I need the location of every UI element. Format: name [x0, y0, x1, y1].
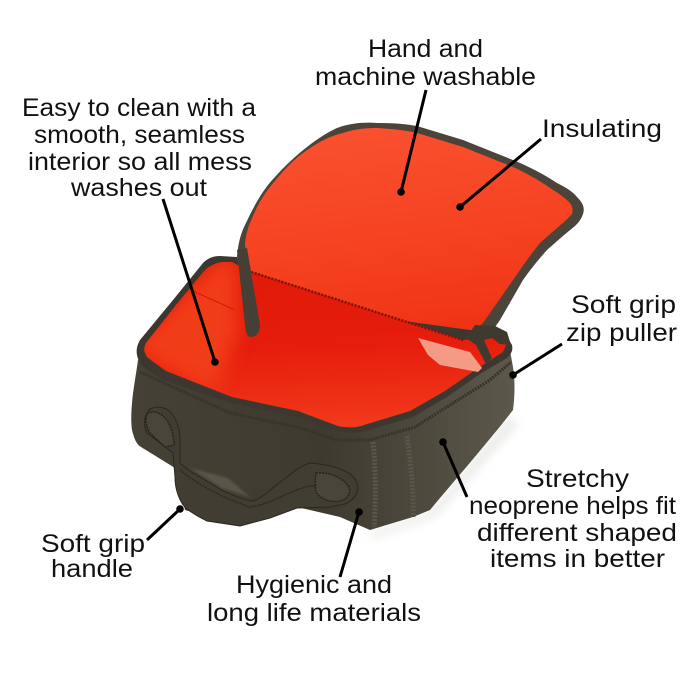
label: stretchy neoprene: items in better — [490, 545, 665, 573]
label: soft grip zip puller: Soft grip — [571, 291, 676, 319]
label: easy to clean: smooth, seamless — [34, 121, 245, 149]
arrow: hygienic — [340, 508, 363, 577]
label: stretchy neoprene: Stretchy — [526, 465, 630, 493]
base body — [131, 345, 514, 530]
arrow: insulating — [456, 139, 541, 211]
right handle loop — [315, 473, 350, 502]
label: stretchy neoprene: neoprene helps fit — [469, 492, 676, 520]
label: hand and machine washable: Hand and — [368, 35, 483, 63]
label: soft grip handle: Soft grip — [41, 530, 145, 558]
rim stitched band — [140, 362, 511, 440]
arrow: zip puller — [509, 344, 562, 379]
arrow: handle — [147, 505, 184, 540]
label: soft grip zip puller: zip puller — [566, 319, 677, 347]
handle — [145, 407, 358, 526]
label: hygienic materials — [207, 571, 421, 627]
handle top seam — [180, 470, 316, 507]
label: hygienic materials: long life materials — [207, 599, 421, 627]
lighter patch under handle — [190, 468, 250, 497]
right zip strap and puller — [466, 325, 511, 364]
label: easy to clean: Easy to clean with a — [22, 94, 256, 122]
label: soft grip zip puller — [566, 291, 677, 347]
left orange interior wall — [144, 262, 244, 391]
label: easy to clean: interior so all mess — [28, 148, 252, 176]
product: open lunch bag — [130, 123, 584, 538]
label: easy to clean: washes out — [70, 174, 207, 202]
label: stretchy neoprene: different shaped — [477, 519, 677, 547]
infographic canvas — [24, 39, 677, 626]
arrow: stretchy neoprene — [439, 438, 467, 497]
label: stretchy neoprene — [469, 465, 677, 573]
zipper stitch — [248, 271, 463, 340]
ground shadow — [370, 415, 516, 538]
label: soft grip handle — [41, 530, 145, 583]
left handle loop — [146, 412, 174, 447]
arrow: easy to clean — [163, 199, 219, 366]
base rim trim — [137, 256, 512, 433]
label: hand and machine washable — [315, 35, 536, 91]
body side seams — [373, 436, 413, 527]
arrow: washable — [397, 90, 426, 196]
label: hygienic materials: Hygienic and — [236, 571, 392, 599]
label: soft grip handle: handle — [51, 555, 133, 583]
label: insulating: Insulating — [542, 115, 662, 143]
left interior crease — [193, 291, 235, 310]
label: hand and machine washable: machine washable — [315, 63, 536, 91]
care label — [418, 338, 482, 372]
lid red interior — [245, 128, 573, 340]
lid outer trim — [237, 123, 584, 335]
handle strap — [145, 407, 358, 526]
base red interior — [144, 262, 507, 427]
label: easy to clean — [22, 94, 256, 202]
left zip strap — [237, 248, 260, 337]
